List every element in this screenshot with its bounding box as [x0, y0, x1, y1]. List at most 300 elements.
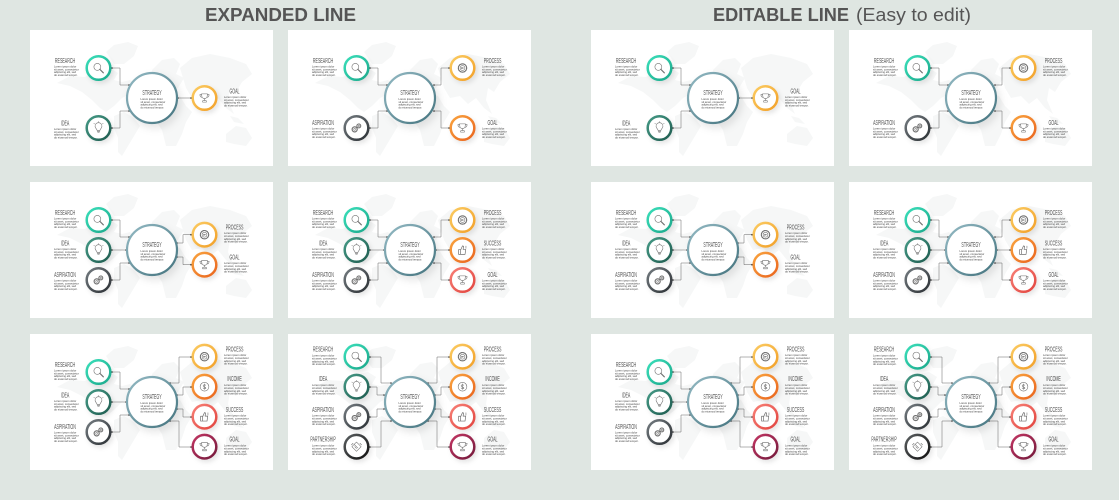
panel: editable, research aspiration process goal	[849, 30, 1092, 166]
node: strategy: do eiusmod tempor.	[398, 409, 422, 413]
node: success: sit amet, consectetur	[785, 416, 810, 420]
node: goal	[1012, 116, 1068, 140]
node: aspiration: adipiscing elit, sed	[54, 436, 76, 440]
node: research	[615, 56, 671, 80]
node: process: PROCESS	[1045, 347, 1063, 354]
node: goal: GOAL	[1048, 120, 1059, 128]
node: aspiration: Lorem ipsum dolor	[873, 278, 895, 282]
node: partnership	[871, 435, 929, 458]
connectors	[112, 220, 191, 280]
node: process: do eiusmod tempor.	[785, 240, 809, 244]
node: income: INCOME	[227, 376, 242, 384]
node: aspiration: do eiusmod tempor.	[615, 287, 639, 291]
node: goal: GOAL	[229, 437, 240, 444]
node: research: do eiusmod tempor.	[615, 73, 639, 77]
panel: editable, three left four right	[591, 334, 834, 470]
panel: expanded, three left four right	[30, 334, 273, 470]
node: research: do eiusmod tempor.	[312, 362, 336, 366]
node: process	[1012, 345, 1068, 368]
node: success: Lorem ipsum dolor	[1043, 247, 1065, 251]
node: aspiration: adipiscing elit, sed	[312, 132, 334, 136]
node: aspiration: ASPIRATION	[312, 407, 334, 415]
node: process: Lorem ipsum dolor	[224, 353, 246, 357]
node: partnership	[310, 435, 368, 458]
node: goal: do eiusmod tempor.	[785, 452, 809, 456]
node: aspiration: Lorem ipsum dolor	[615, 278, 637, 282]
node: process: do eiusmod tempor.	[785, 362, 809, 366]
node: strategy: sit amet, consectetur	[960, 404, 984, 408]
node: research: adipiscing elit, sed	[615, 70, 637, 74]
node: aspiration: adipiscing elit, sed	[615, 436, 637, 440]
node: idea: Lorem ipsum dolor	[873, 247, 895, 251]
node: idea: IDEA	[880, 376, 889, 384]
node: goal: sit amet, consectetur	[785, 446, 810, 450]
node: goal: Lorem ipsum dolor	[1043, 126, 1065, 130]
node: goal: Lorem ipsum dolor	[785, 261, 807, 265]
node: strategy: Lorem ipsum dolor	[702, 249, 724, 253]
node: income: do eiusmod tempor.	[1043, 392, 1067, 396]
node: strategy: sit amet, consectetur	[702, 252, 726, 256]
node: process: PROCESS	[787, 347, 805, 354]
node: idea: IDEA	[622, 120, 631, 128]
node: strategy: Lorem ipsum dolor	[960, 249, 982, 253]
node: aspiration: Lorem ipsum dolor	[873, 126, 895, 130]
node: income: INCOME	[1046, 376, 1061, 384]
node: goal: adipiscing elit, sed	[224, 449, 246, 453]
node: process: do eiusmod tempor.	[1043, 225, 1067, 229]
node: idea: adipiscing elit, sed	[312, 253, 334, 257]
node: idea: sit amet, consectetur	[873, 386, 898, 390]
node: aspiration: adipiscing elit, sed	[873, 419, 895, 423]
panel: expanded, four left four right	[288, 334, 531, 470]
node: research	[873, 345, 929, 368]
node: strategy: STRATEGY	[703, 394, 723, 402]
node: strategy: Lorem ipsum dolor	[140, 97, 163, 101]
panel: expanded, research aspiration process goal	[288, 30, 531, 166]
node: process: Lorem ipsum dolor	[1043, 353, 1065, 357]
node: process: Lorem ipsum dolor	[482, 216, 504, 220]
node: process: PROCESS	[1045, 58, 1063, 66]
node: research: Lorem ipsum dolor	[615, 64, 637, 68]
node: strategy: adipiscing elit, sed	[398, 255, 421, 259]
node: goal: adipiscing elit, sed	[1043, 449, 1065, 453]
node: goal: do eiusmod tempor.	[1043, 135, 1067, 139]
node: strategy: adipiscing elit, sed	[398, 103, 421, 107]
node: aspiration: do eiusmod tempor.	[873, 287, 897, 291]
node: process: do eiusmod tempor.	[482, 225, 506, 229]
node: process: do eiusmod tempor.	[482, 73, 506, 77]
node: idea	[615, 390, 671, 414]
node: process: PROCESS	[787, 225, 805, 232]
node: research: do eiusmod tempor.	[873, 73, 897, 77]
node: goal: do eiusmod tempor.	[785, 103, 809, 107]
node: aspiration: ASPIRATION	[873, 272, 895, 280]
node: process: adipiscing elit, sed	[785, 359, 807, 363]
node: strategy: do eiusmod tempor.	[398, 105, 422, 109]
node: goal: sit amet, consectetur	[1043, 129, 1068, 133]
node: aspiration: sit amet, consectetur	[54, 281, 79, 285]
node: research: do eiusmod tempor.	[312, 225, 336, 229]
node: research: Lorem ipsum dolor	[312, 64, 334, 68]
node: research: RESEARCH	[55, 210, 75, 218]
node: idea	[615, 238, 671, 262]
node: strategy: sit amet, consectetur	[702, 100, 726, 104]
node: goal: Lorem ipsum dolor	[224, 444, 246, 448]
node: strategy	[946, 73, 996, 123]
node: income: Lorem ipsum dolor	[224, 383, 246, 387]
panel: editable, four left four right	[849, 334, 1092, 470]
node: research: Lorem ipsum dolor	[312, 216, 334, 220]
node: goal: do eiusmod tempor.	[482, 452, 506, 456]
node: goal: GOAL	[487, 120, 498, 128]
node: research: do eiusmod tempor.	[615, 225, 639, 229]
heading: expanded line: EXPANDED LINE	[205, 5, 356, 25]
node: income: adipiscing elit, sed	[482, 389, 504, 393]
node: goal	[193, 86, 249, 110]
node: goal: do eiusmod tempor.	[224, 103, 248, 107]
node: income: sit amet, consectetur	[482, 386, 507, 390]
node: strategy: do eiusmod tempor.	[702, 257, 725, 261]
node: income: Lorem ipsum dolor	[785, 383, 807, 387]
node: idea: Lorem ipsum dolor	[54, 399, 76, 403]
node: process: do eiusmod tempor.	[1043, 73, 1067, 77]
node: partnership: Lorem ipsum dolor	[312, 444, 334, 448]
node: goal	[451, 435, 507, 458]
node: goal: Lorem ipsum dolor	[482, 444, 504, 448]
node: strategy: Lorem ipsum dolor	[960, 401, 982, 405]
connectors	[931, 220, 1010, 280]
node: aspiration: ASPIRATION	[873, 407, 895, 415]
node: research: adipiscing elit, sed	[873, 359, 895, 363]
node: aspiration: do eiusmod tempor.	[54, 287, 78, 291]
connectors	[931, 68, 1010, 128]
node: research: adipiscing elit, sed	[615, 222, 637, 226]
node: process: sit amet, consectetur	[785, 356, 810, 360]
panel: expanded, research idea goal	[30, 30, 273, 166]
node: aspiration: ASPIRATION	[615, 272, 637, 280]
connectors	[673, 357, 752, 447]
node: strategy: Lorem ipsum dolor	[702, 97, 724, 101]
node: goal: Lorem ipsum dolor	[224, 261, 246, 265]
node: goal: GOAL	[790, 88, 801, 96]
node: aspiration	[54, 268, 110, 292]
node: idea: do eiusmod tempor.	[54, 407, 78, 411]
node: research: RESEARCH	[874, 58, 894, 66]
node: success: Lorem ipsum dolor	[482, 247, 504, 251]
node: goal: GOAL	[229, 88, 240, 96]
node: aspiration: do eiusmod tempor.	[312, 287, 336, 291]
node: idea: sit amet, consectetur	[615, 130, 640, 134]
panel: editable, research idea goal	[591, 30, 834, 166]
node: research: sit amet, consectetur	[54, 371, 79, 375]
node: success: Lorem ipsum dolor	[224, 414, 246, 418]
node: aspiration: ASPIRATION	[615, 424, 637, 432]
node: aspiration: Lorem ipsum dolor	[54, 430, 76, 434]
node: research	[312, 56, 368, 80]
node: research	[873, 208, 929, 232]
node: goal	[1012, 268, 1068, 292]
node: idea: adipiscing elit, sed	[54, 133, 76, 137]
node: aspiration: do eiusmod tempor.	[615, 439, 639, 443]
node: aspiration: adipiscing elit, sed	[312, 419, 334, 423]
node: goal: sit amet, consectetur	[224, 264, 249, 268]
node: research	[873, 56, 929, 80]
node: process: sit amet, consectetur	[1043, 219, 1068, 223]
node: strategy: do eiusmod tempor.	[960, 409, 983, 413]
node: income: Lorem ipsum dolor	[482, 383, 504, 387]
node: idea: adipiscing elit, sed	[615, 253, 637, 257]
node: strategy: STRATEGY	[400, 394, 420, 402]
node: aspiration: sit amet, consectetur	[312, 129, 337, 133]
node: research: sit amet, consectetur	[615, 67, 640, 71]
node: research: RESEARCH	[313, 347, 333, 354]
node: success: adipiscing elit, sed	[224, 419, 246, 423]
node: income: sit amet, consectetur	[224, 386, 249, 390]
node: strategy: STRATEGY	[142, 242, 162, 250]
node: research: RESEARCH	[313, 58, 333, 66]
node: strategy: Lorem ipsum dolor	[140, 401, 163, 405]
node: success: do eiusmod tempor.	[482, 422, 506, 426]
node: process	[754, 223, 810, 246]
node: strategy: STRATEGY	[961, 90, 981, 98]
node: goal: Lorem ipsum dolor	[482, 126, 504, 130]
node: aspiration: do eiusmod tempor.	[873, 135, 897, 139]
node: research: adipiscing elit, sed	[54, 374, 76, 378]
node: research	[312, 345, 368, 368]
node: process: adipiscing elit, sed	[1043, 359, 1065, 363]
node: goal	[754, 435, 810, 458]
node: goal: sit amet, consectetur	[482, 129, 507, 133]
node: income: INCOME	[485, 376, 500, 384]
node: goal: do eiusmod tempor.	[1043, 287, 1067, 291]
node: research: sit amet, consectetur	[312, 67, 337, 71]
panel: expanded, three left two right	[30, 182, 273, 318]
node: research: Lorem ipsum dolor	[54, 216, 76, 220]
node: goal: adipiscing elit, sed	[785, 101, 807, 105]
node: success: do eiusmod tempor.	[482, 255, 506, 259]
node: strategy: do eiusmod tempor.	[960, 257, 983, 261]
node: idea: IDEA	[61, 240, 70, 248]
node: idea: sit amet, consectetur	[873, 250, 898, 254]
node: goal: GOAL	[487, 272, 498, 280]
node: process: do eiusmod tempor.	[1043, 362, 1067, 366]
node: idea: Lorem ipsum dolor	[54, 247, 76, 251]
node: research	[54, 360, 110, 384]
node: process: sit amet, consectetur	[1043, 356, 1068, 360]
node: idea: Lorem ipsum dolor	[615, 127, 637, 131]
node: success	[451, 405, 507, 428]
node: success: do eiusmod tempor.	[1043, 422, 1067, 426]
node: research: Lorem ipsum dolor	[54, 368, 76, 372]
node: success: SUCCESS	[484, 240, 502, 248]
node: income: INCOME	[788, 376, 803, 384]
node: strategy: STRATEGY	[703, 90, 723, 98]
node: success: sit amet, consectetur	[482, 416, 507, 420]
node: income	[451, 375, 507, 398]
node: aspiration: Lorem ipsum dolor	[615, 430, 637, 434]
node: process: Lorem ipsum dolor	[482, 64, 504, 68]
node: idea: IDEA	[319, 240, 328, 248]
node: idea: sit amet, consectetur	[312, 386, 337, 390]
node: research: RESEARCH	[616, 210, 636, 218]
node: strategy: do eiusmod tempor.	[702, 409, 725, 413]
node: strategy: STRATEGY	[142, 394, 162, 402]
node: strategy	[688, 225, 738, 275]
node: income: sit amet, consectetur	[1043, 386, 1068, 390]
node: idea: IDEA	[61, 120, 70, 128]
node: goal: do eiusmod tempor.	[1043, 452, 1067, 456]
node: process: Lorem ipsum dolor	[785, 353, 807, 357]
node: research	[312, 208, 368, 232]
node: idea	[312, 238, 368, 262]
node: success: SUCCESS	[226, 407, 244, 415]
node: aspiration: ASPIRATION	[54, 424, 76, 432]
node: aspiration: Lorem ipsum dolor	[312, 126, 334, 130]
node: process: sit amet, consectetur	[482, 356, 507, 360]
node: idea: adipiscing elit, sed	[54, 405, 76, 409]
node: idea	[312, 375, 368, 398]
node: partnership: PARTNERSHIP	[871, 437, 897, 444]
connectors	[370, 220, 449, 280]
node: goal: Lorem ipsum dolor	[785, 444, 807, 448]
node: goal	[754, 86, 810, 110]
node: process: Lorem ipsum dolor	[1043, 64, 1065, 68]
node: process: do eiusmod tempor.	[482, 362, 506, 366]
node: research: RESEARCH	[313, 210, 333, 218]
node: process	[1012, 56, 1068, 80]
node: process: Lorem ipsum dolor	[785, 231, 807, 235]
node: aspiration: ASPIRATION	[312, 272, 334, 280]
node: goal	[1012, 435, 1068, 458]
node: aspiration	[615, 420, 671, 444]
node: process: adipiscing elit, sed	[785, 237, 807, 241]
node: idea	[54, 390, 110, 414]
node: strategy: adipiscing elit, sed	[702, 407, 724, 411]
panel: editable, three left two right	[591, 182, 834, 318]
node: aspiration	[873, 268, 929, 292]
node: goal: GOAL	[790, 437, 801, 444]
node: goal: sit amet, consectetur	[785, 98, 810, 102]
node: goal: GOAL	[1048, 272, 1059, 280]
node: research: sit amet, consectetur	[54, 67, 79, 71]
node: success: Lorem ipsum dolor	[785, 414, 807, 418]
node: aspiration: sit amet, consectetur	[615, 281, 640, 285]
node: aspiration	[312, 116, 368, 140]
node: strategy: adipiscing elit, sed	[140, 255, 163, 259]
node: idea: do eiusmod tempor.	[54, 255, 78, 259]
node: research: adipiscing elit, sed	[312, 222, 334, 226]
node: goal: GOAL	[1048, 437, 1059, 444]
node: research: RESEARCH	[55, 58, 75, 66]
node: income: adipiscing elit, sed	[224, 389, 246, 393]
node: goal	[754, 253, 810, 276]
node: success: SUCCESS	[484, 407, 502, 415]
node: strategy	[688, 73, 738, 123]
node: aspiration: adipiscing elit, sed	[873, 132, 895, 136]
node: goal: Lorem ipsum dolor	[1043, 278, 1065, 282]
node: idea: IDEA	[622, 240, 631, 248]
node: aspiration: sit amet, consectetur	[873, 281, 898, 285]
panel: editable, three left three right	[849, 182, 1092, 318]
node: process: adipiscing elit, sed	[482, 222, 504, 226]
node: partnership: adipiscing elit, sed	[873, 449, 895, 453]
connectors	[370, 357, 449, 447]
node: goal: adipiscing elit, sed	[785, 449, 807, 453]
node: process: PROCESS	[484, 210, 502, 218]
node: goal	[451, 268, 507, 292]
node: process: sit amet, consectetur	[482, 219, 507, 223]
node: goal	[451, 116, 507, 140]
node: success: sit amet, consectetur	[1043, 250, 1068, 254]
node: aspiration: sit amet, consectetur	[873, 416, 898, 420]
node: idea: do eiusmod tempor.	[873, 255, 897, 259]
node: goal: GOAL	[229, 255, 240, 262]
node: strategy: adipiscing elit, sed	[140, 103, 163, 107]
node: research: Lorem ipsum dolor	[873, 354, 895, 358]
node: process: adipiscing elit, sed	[1043, 222, 1065, 226]
node: research: Lorem ipsum dolor	[312, 354, 334, 358]
node: research: sit amet, consectetur	[615, 371, 640, 375]
node: research: Lorem ipsum dolor	[873, 216, 895, 220]
node: partnership: sit amet, consectetur	[312, 446, 337, 450]
node: aspiration: Lorem ipsum dolor	[873, 414, 895, 418]
node: strategy: sit amet, consectetur	[140, 404, 165, 408]
node: idea: sit amet, consectetur	[312, 250, 337, 254]
node: goal: Lorem ipsum dolor	[785, 95, 807, 99]
heading: editable line: (Easy to edit)	[856, 5, 971, 25]
node: strategy: sit amet, consectetur	[140, 252, 165, 256]
node: income: Lorem ipsum dolor	[1043, 383, 1065, 387]
node: process	[451, 208, 507, 232]
node: success	[754, 405, 810, 428]
node: strategy: do eiusmod tempor.	[140, 105, 164, 109]
node: partnership: do eiusmod tempor.	[312, 452, 336, 456]
node: idea	[54, 116, 110, 140]
node: research: sit amet, consectetur	[873, 219, 898, 223]
node: idea	[615, 116, 671, 140]
node: strategy: do eiusmod tempor.	[960, 105, 983, 109]
node: goal: GOAL	[790, 255, 801, 262]
node: strategy	[946, 225, 996, 275]
node: idea: IDEA	[319, 376, 328, 384]
node: goal: do eiusmod tempor.	[482, 135, 506, 139]
node: research	[54, 208, 110, 232]
node: goal: Lorem ipsum dolor	[482, 278, 504, 282]
node: goal: GOAL	[487, 437, 498, 444]
node: aspiration: adipiscing elit, sed	[873, 284, 895, 288]
node: aspiration: sit amet, consectetur	[312, 281, 337, 285]
node: strategy	[127, 377, 177, 427]
node: research	[615, 360, 671, 384]
node: aspiration: do eiusmod tempor.	[54, 439, 78, 443]
node: aspiration: ASPIRATION	[873, 120, 895, 128]
node: partnership: adipiscing elit, sed	[312, 449, 334, 453]
node: research: sit amet, consectetur	[312, 357, 337, 361]
node: goal: sit amet, consectetur	[785, 264, 810, 268]
node: strategy: adipiscing elit, sed	[960, 407, 982, 411]
node: strategy: sit amet, consectetur	[702, 404, 726, 408]
node: process: adipiscing elit, sed	[1043, 70, 1065, 74]
node: process	[451, 345, 507, 368]
node: idea: sit amet, consectetur	[54, 130, 79, 134]
node: goal: adipiscing elit, sed	[482, 284, 504, 288]
node: strategy: sit amet, consectetur	[960, 252, 984, 256]
node: research	[54, 56, 110, 80]
node: strategy	[127, 73, 177, 123]
node: process: sit amet, consectetur	[785, 234, 810, 238]
node: aspiration	[54, 420, 110, 444]
node: strategy: adipiscing elit, sed	[398, 407, 421, 411]
